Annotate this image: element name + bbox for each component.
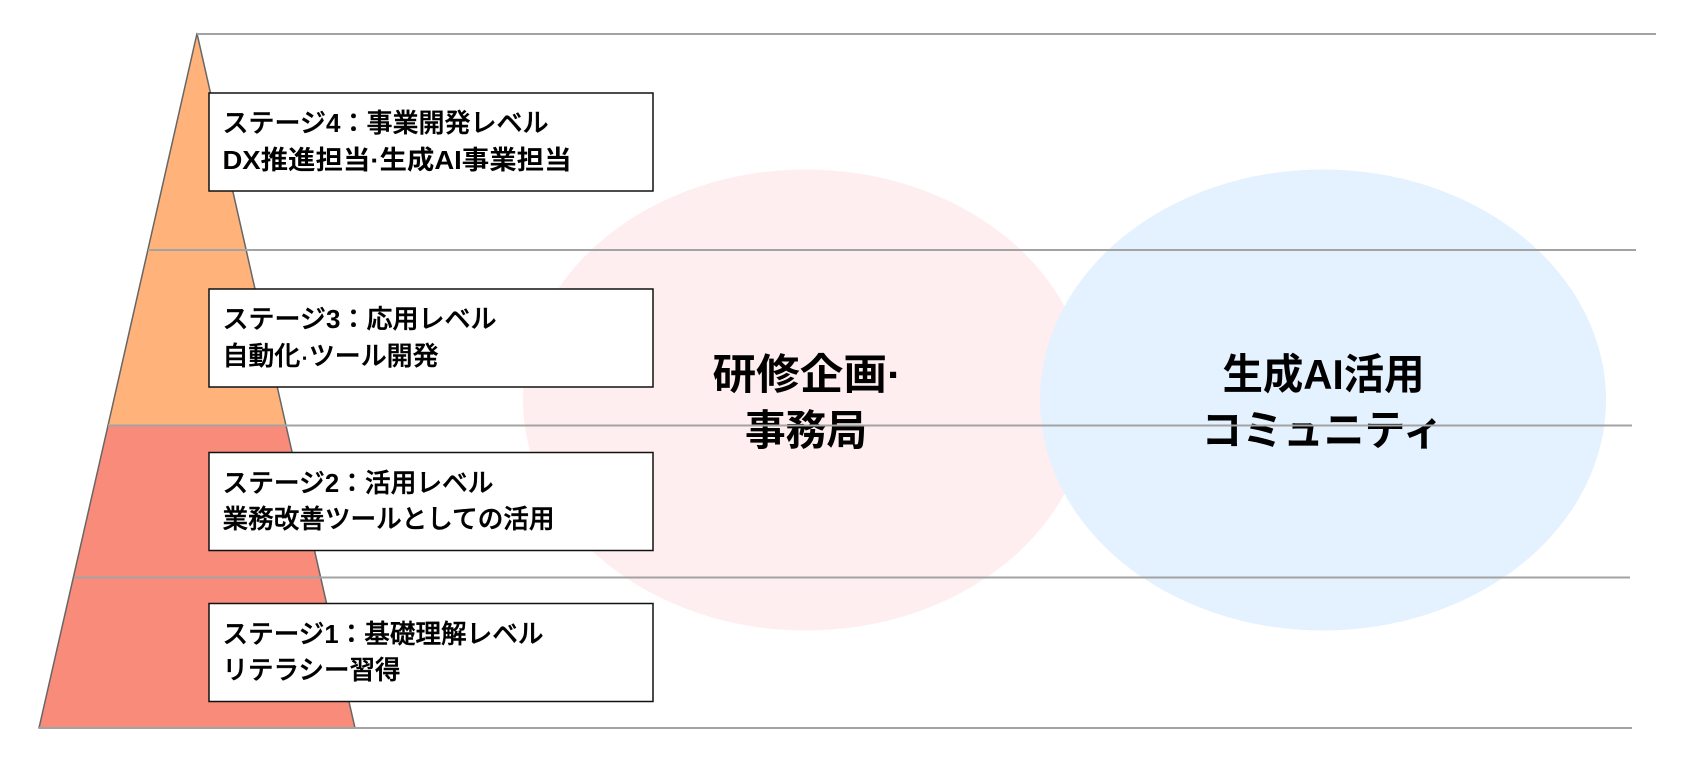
box: stage 4: [209, 93, 653, 191]
box: stage 1: リテラシー習得: [222, 655, 400, 685]
label: generative AI community: コミュニティ: [1202, 407, 1444, 454]
box: stage 1: ステージ1：基礎理解レベル: [222, 619, 544, 649]
pyramid lower tiers: stages 1 and 2: [39, 426, 355, 728]
box: stage 2: 業務改善ツールとしての活用: [222, 504, 554, 534]
label: training planning secretariat: 研修企画·: [712, 351, 902, 398]
box: stage 3: 自動化·ツール開発: [222, 341, 438, 371]
label: training planning secretariat: 事務局: [745, 407, 867, 454]
box: stage 3: [209, 289, 653, 387]
label: training planning secretariat: [712, 351, 902, 454]
circle: generative AI community: [1040, 170, 1606, 630]
box: stage 3: ステージ3：応用レベル: [222, 304, 496, 334]
box: stage 2: [209, 452, 653, 550]
pyramid upper tiers: stages 3 and 4: [108, 34, 286, 426]
label: generative AI community: [1202, 351, 1444, 454]
circle: training planning secretariat: [523, 170, 1089, 630]
box: stage 2: ステージ2：活用レベル: [222, 468, 494, 498]
box: stage 4: ステージ4：事業開発レベル: [222, 108, 548, 138]
box: stage 1: [209, 604, 653, 702]
label: generative AI community: 生成AI活用: [1222, 351, 1424, 398]
pyramid: [39, 34, 355, 728]
box: stage 4: DX推進担当·生成AI事業担当: [222, 145, 572, 175]
